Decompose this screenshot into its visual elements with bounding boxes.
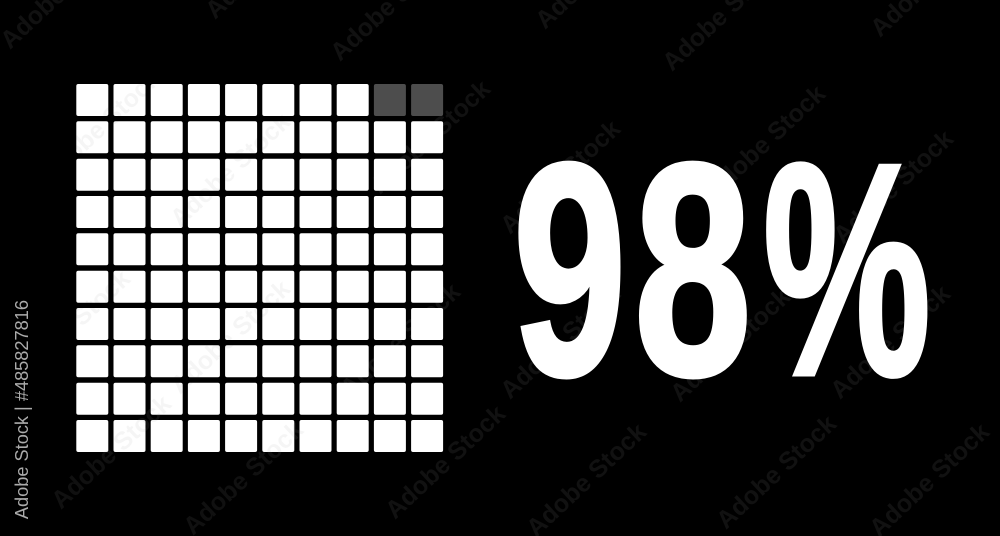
waffle chart: 98 of 100 squares filled: [76, 84, 443, 452]
watermark text on the dark background: Adobe Stock: [46, 390, 177, 514]
row 7: [76, 308, 443, 340]
row 5: [76, 233, 443, 265]
watermark text on the dark background: Adobe Stock: [380, 400, 511, 524]
row 10: [76, 420, 443, 452]
row 2: [76, 121, 443, 153]
percentage value: 98%: 8: [634, 102, 752, 439]
watermark text over the white squares: Adobe Stock: [165, 275, 296, 399]
row 8: [76, 345, 443, 377]
watermark text over the white squares: Adobe Stock: [165, 108, 296, 232]
watermark text on the dark background: Adobe Stock: [495, 280, 626, 404]
row 4: [76, 196, 443, 228]
row 3: [76, 159, 443, 191]
watermark text on the dark background: Adobe Stock: [335, 278, 466, 402]
watermark text on the dark background: Adobe Stock: [825, 280, 956, 404]
percentage value: 98%: 9: [513, 101, 626, 438]
watermark text on the dark background: Adobe Stock: [700, 80, 831, 204]
watermark text on the dark background: Adobe Stock: [665, 283, 796, 407]
watermark text on the dark background: Adobe Stock: [711, 410, 842, 534]
percentage value: 98%: %: [763, 102, 931, 439]
row 6: [76, 271, 443, 303]
watermark text over the white squares: Adobe Stock: [5, 265, 136, 389]
vertical stock id text: Adobe Stock | #485827816: [12, 300, 32, 519]
watermark text over the white squares: Adobe Stock: [46, 390, 177, 514]
watermark text on the dark background: Adobe Stock: [495, 115, 626, 239]
watermark text over the white squares: Adobe Stock: [35, 65, 166, 189]
row 1: 8 filled and 2 unfilled squares: [76, 84, 443, 116]
percentage value: 98%: [513, 101, 931, 439]
watermark text on the dark background: Adobe Stock: [365, 75, 496, 199]
watermark text on the dark background: Adobe Stock: [828, 125, 959, 249]
row 9: [76, 383, 443, 415]
watermark text over the white squares: [5, 65, 309, 536]
